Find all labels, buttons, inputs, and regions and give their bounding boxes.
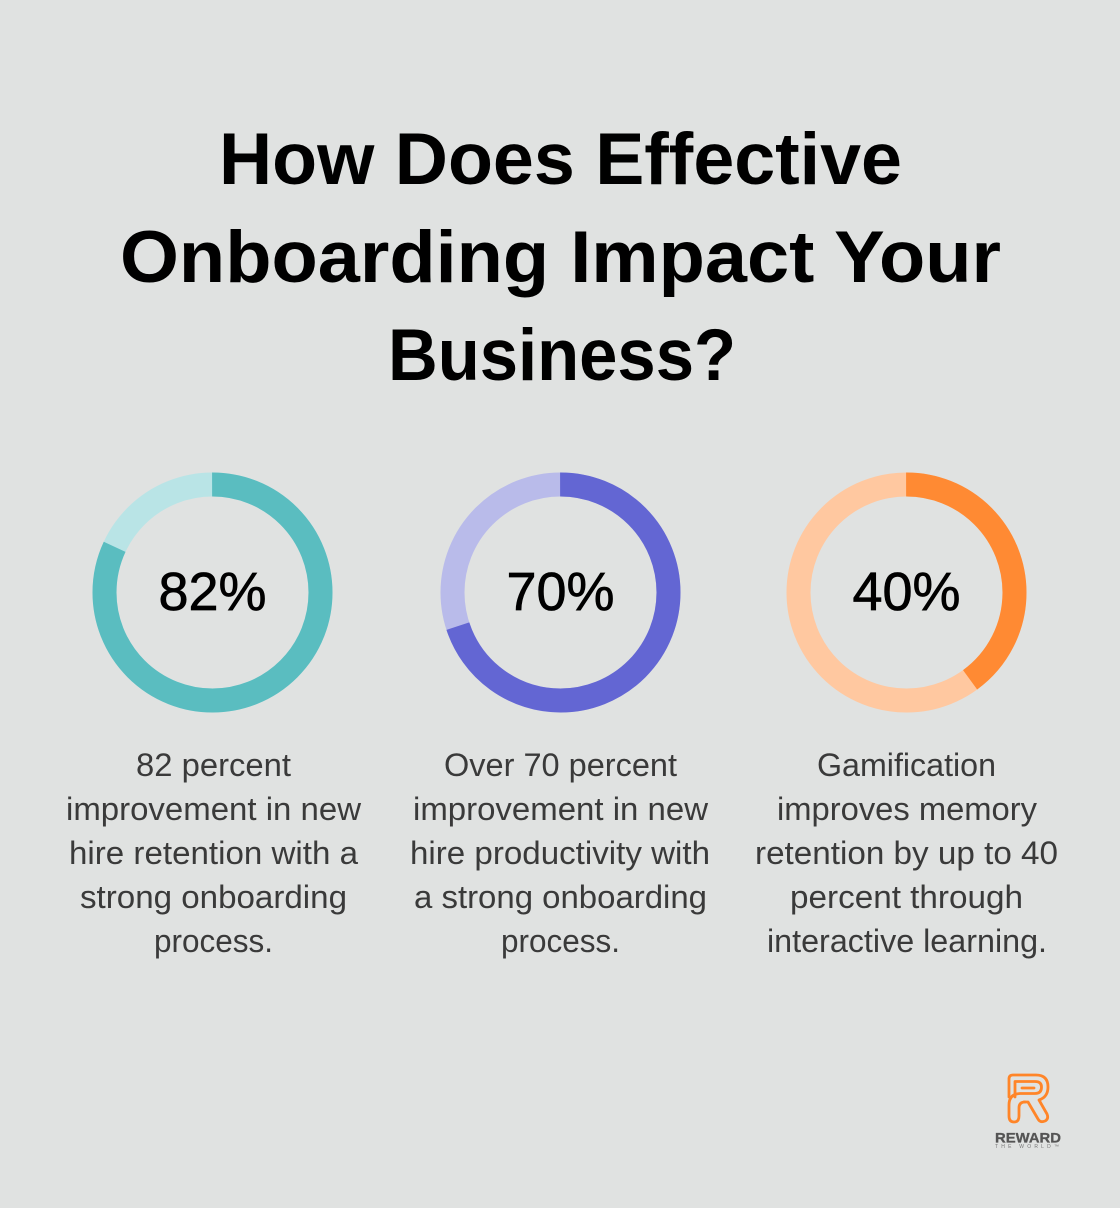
description: productivity: improvement in new: [413, 791, 709, 827]
title: Onboarding Impact Your: [120, 217, 1001, 298]
tagline: THE WORLD™: [995, 1144, 1059, 1150]
description: productivity: process.: [501, 923, 620, 959]
description: productivity: hire productivity with: [410, 835, 710, 871]
panel: 82 percent retention: [66, 484, 362, 959]
icon: R mark: [1009, 1075, 1048, 1122]
description: memory retention: [755, 747, 1058, 959]
description: memory retention: improves memory: [777, 791, 1037, 827]
description: retention: process.: [154, 923, 273, 959]
description: productivity: a strong onboarding: [414, 879, 707, 915]
description: retention: 82 percent: [136, 747, 291, 783]
value: 70%: 70%: [506, 562, 614, 622]
donut chart: 82%: [104, 484, 320, 700]
title: How Does Effective: [219, 119, 902, 200]
donut chart: 40%: [798, 484, 1014, 700]
wordmark: REWARD: [995, 1130, 1061, 1146]
description: retention: improvement in new: [66, 791, 362, 827]
description: productivity: [410, 747, 710, 959]
description: productivity: Over 70 percent: [444, 747, 677, 783]
description: memory retention: Gamification: [817, 747, 996, 783]
title: Business?: [388, 315, 736, 396]
value: 40%: 40%: [852, 562, 960, 622]
description: retention: hire retention with a: [69, 835, 358, 871]
description: memory retention: retention by up to 40: [755, 835, 1058, 871]
title: [120, 119, 1001, 396]
description: retention: [66, 747, 362, 959]
panel: 70 percent productivity: [410, 484, 710, 959]
description: retention: strong onboarding: [80, 879, 347, 915]
donut chart: 70%: [452, 484, 668, 700]
logo: Reward the World: [995, 1075, 1061, 1150]
description: memory retention: percent through: [790, 879, 1023, 915]
description: memory retention: interactive learning.: [767, 923, 1047, 959]
value: 82%: 82%: [158, 562, 266, 622]
panel: 40 percent memory retention: [755, 484, 1058, 959]
